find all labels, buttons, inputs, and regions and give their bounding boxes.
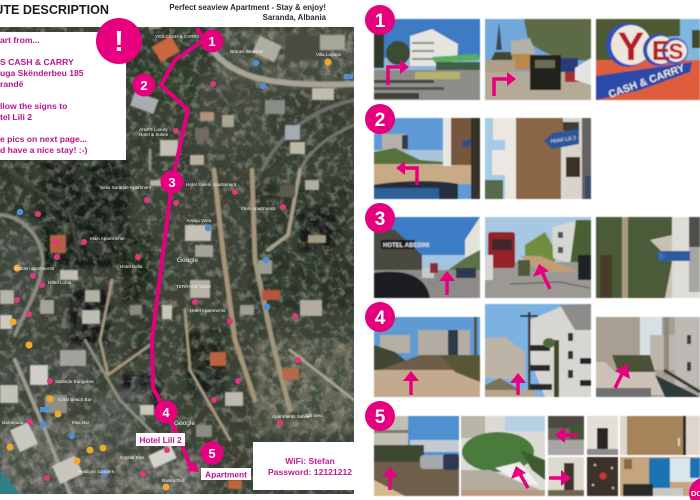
map place labels: Hotel & Suites (139, 132, 169, 137)
step badge 1: 1 (375, 11, 386, 32)
map marker 2 (132, 74, 156, 96)
panel: start instructions: uga Skënderbeu 185 (0, 68, 84, 78)
map marker 4: 4 (162, 405, 170, 420)
label: Apartment (201, 468, 251, 480)
map marker 5 (200, 442, 224, 464)
arrow step 4b (510, 373, 526, 395)
map marker 5: 5 (208, 446, 216, 461)
photo step 2b: hotel direction sign (485, 118, 591, 199)
photo step 5c: entrance view (548, 416, 584, 455)
panel: start instructions: tel Lili 2 (0, 112, 32, 122)
map place labels: Coral Beach Bar (58, 397, 92, 402)
photo step 1c: YES Cash & Carry sign: Y (618, 25, 645, 69)
map marker 1 (200, 30, 224, 52)
photo step 5g: apartment door (620, 416, 700, 455)
map place labels: Selia Sarande Apartment (100, 185, 152, 190)
panel: start instructions (0, 32, 126, 160)
map place labels: Hotel Lobia (48, 280, 72, 285)
google watermarks (174, 257, 198, 427)
arrow step 2a (396, 161, 417, 185)
photo step 5b: stairs behind tree (461, 416, 545, 496)
map place labels: Maxi Apartmente (90, 236, 125, 241)
subtitle: apartment and location: Saranda, Albania (263, 13, 327, 22)
callout: door badge (689, 478, 700, 500)
panel: wifi details: Password: 12121212 (268, 467, 352, 477)
panel: wifi details: WiFi: Stefan (285, 456, 335, 466)
step badge 4 (365, 302, 395, 332)
panel: start instructions: randë (0, 79, 24, 89)
photo step 4c: ramp beside building (596, 317, 700, 397)
label: Hotel Lili 2 (136, 433, 185, 446)
panel: start instructions: S CASH & CARRY (0, 57, 74, 67)
arrow step 4c (615, 364, 630, 388)
step badge 3: 3 (375, 209, 385, 230)
photo step 3b: red van on road (485, 217, 591, 298)
photo step 3a: hotel Abedini street: HOTEL ABEDINI (383, 243, 430, 249)
photo step 3c: trees with blue sign (596, 217, 700, 298)
map place labels: Eleni Apartments (241, 206, 276, 211)
arrow step 1a (388, 60, 409, 85)
icon: exclamation badge: ! (114, 26, 124, 58)
map marker 3 (160, 170, 184, 194)
map place labels: Banka Tedi (162, 478, 185, 483)
map place labels: YES CASH & CARRY (155, 34, 200, 39)
map place labels: Max Bar (72, 420, 90, 425)
map marker 3: 3 (168, 175, 176, 190)
step badge 2: 2 (375, 110, 385, 131)
arrow step 5a (382, 467, 398, 490)
photo step 4b: apartment block (485, 304, 591, 397)
arrow step 5b (511, 466, 528, 488)
map place labels (2, 34, 342, 483)
photo step 2a: view past brick building (374, 118, 480, 199)
panel: start instructions: art from... (0, 35, 40, 45)
step badge 3 (365, 203, 395, 233)
photo step 3a: hotel Abedini street (374, 217, 480, 298)
sea (0, 470, 20, 494)
map place labels: Hotel Bella (120, 264, 143, 269)
label: Apartment: Apartment (205, 470, 247, 480)
map place labels: Apartments Salvia (272, 414, 310, 419)
map marker 4 (154, 400, 178, 424)
satellite map with route (0, 27, 355, 495)
icon: exclamation badge (96, 18, 142, 64)
photo step 5d: white wall with door (587, 416, 618, 455)
arrow step 4a (403, 371, 419, 395)
photo step 1c: YES Cash & Carry sign (596, 19, 700, 101)
step badge 4: 4 (375, 308, 386, 329)
step badge 1 (365, 5, 395, 35)
map place labels: Hotel Sareni Apartament (186, 182, 237, 187)
photo step 1c: YES Cash & Carry sign: E (652, 35, 670, 66)
panel: start instructions: e pics on next page... (0, 134, 87, 144)
step badge 5: 5 (375, 407, 386, 428)
map marker 2: 2 (140, 78, 148, 93)
photo step 5a: car park (374, 416, 459, 496)
arrow step 3a (439, 271, 455, 295)
photo step 1b: junction with jeep (485, 19, 591, 100)
map place labels: Pastiçeri Sanders (78, 469, 115, 474)
google watermarks: Google (177, 257, 198, 264)
map place labels: Kalaja Vista (187, 218, 212, 223)
map place labels: Hotel Apartments (190, 308, 226, 313)
photo step 5e: corridor (548, 457, 584, 496)
map place labels: Crystal Kiss (120, 455, 145, 460)
map place labels: Artist's Luxury (139, 127, 168, 132)
photo step 1c: YES Cash & Carry sign: CASH & CARRY (607, 62, 686, 101)
panel: start instructions: d have a nice stay! :-) (0, 145, 88, 155)
arrow step 3b (533, 264, 550, 289)
map place labels: TERRACE VIEW (176, 284, 212, 289)
subtitle: apartment and location: Perfect seaview Apartment - Stay & enjoy! (169, 3, 326, 12)
panel: start instructions: llow the signs to (0, 101, 67, 111)
panel: wifi details (253, 442, 354, 490)
map place labels: Golden apartments (15, 266, 55, 271)
map place labels: Barracuda (2, 420, 24, 425)
map place labels: Sarande Bungalow (55, 379, 95, 384)
label: Hotel Lili 2: Hotel Lili 2 (139, 435, 182, 445)
map place labels: Brunes Seaview (230, 49, 264, 54)
photo step 1c: YES Cash & Carry sign: S (669, 39, 683, 64)
arrow step 5e (549, 470, 571, 486)
map place labels: Villa Lagoon (316, 52, 342, 57)
photo step 5f: dark door with red light (587, 457, 618, 496)
route line (152, 28, 204, 472)
map place labels: Ola Sled (305, 413, 323, 418)
arrow step 5c (555, 427, 578, 443)
step badge 5 (365, 401, 395, 431)
map marker 1: 1 (208, 34, 216, 49)
arrow step 1b (494, 72, 516, 96)
step badge 2 (365, 104, 395, 134)
subtitle: apartment and location (169, 3, 327, 22)
photo step 1a: street with petrol station (374, 19, 480, 100)
photo step 4a: dirt track to buildings (374, 317, 480, 397)
photo step 5h: apartment living room (620, 457, 700, 496)
google watermarks: Google (174, 420, 195, 427)
photo step 2b: hotel direction sign: Hotel Lili 2 (550, 135, 577, 145)
